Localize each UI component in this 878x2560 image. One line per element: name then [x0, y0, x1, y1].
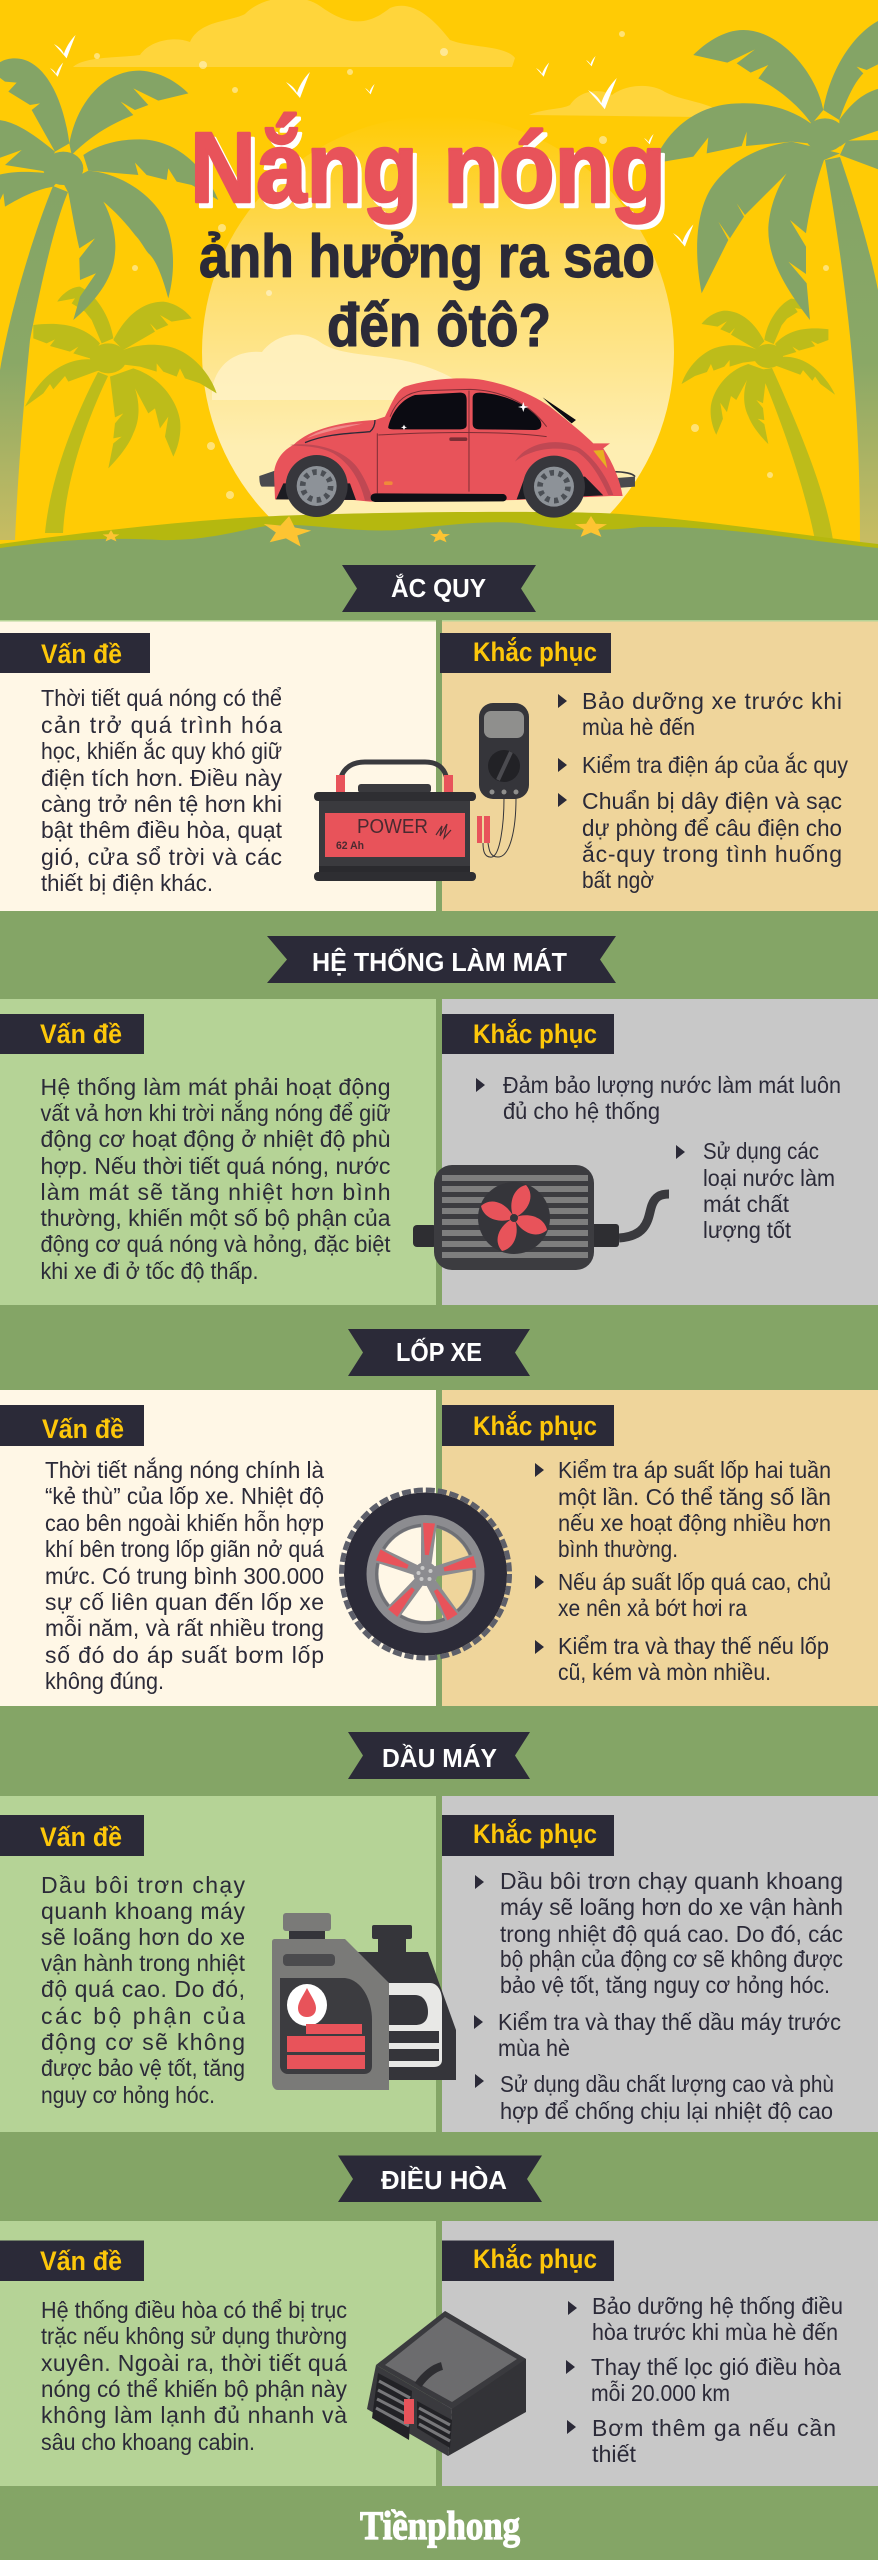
text: làm mát problem: khi xe đi ở tốc độ thấp. [40, 1258, 258, 1284]
list: điều hòa fixes: Thay thế lọc gió điều hòa [591, 2354, 841, 2380]
cloud: in sun [212, 335, 470, 400]
background strip: green page sections [0, 620, 878, 2560]
panel: làm mát khắc phục [442, 999, 878, 1305]
footer logo: Tiền Phong: Tiềnphong [360, 2503, 520, 2548]
text: dầu máy problem: Dầu bôi trơn chạy [41, 1872, 246, 1898]
list: lốp xe fixes: xe nên xả bớt hơi ra [558, 1595, 747, 1621]
text: làm mát problem: vất vả hơn khi trời nắng nóng để giữ [40, 1100, 390, 1126]
panel: dầu máy vấn đề [0, 1796, 436, 2132]
list: làm mát fixes: mát chất [703, 1191, 790, 1217]
tab: vấn đề: Vấn đề [40, 1822, 122, 1852]
tab: vấn đề [0, 1815, 144, 1856]
panel: ắc quy vấn đề [0, 620, 436, 911]
tab: vấn đề [0, 1014, 144, 1054]
palm: large right [653, 20, 878, 545]
tab: khắc phục [442, 1815, 614, 1856]
title: đến ôtô? [327, 292, 551, 359]
tab: khắc phục: Khắc phục [473, 2243, 597, 2274]
text: lốp xe problem: không đúng. [45, 1668, 164, 1694]
list: làm mát fixes: Sử dụng các [703, 1138, 819, 1164]
tab: vấn đề: Vấn đề [40, 1019, 122, 1049]
list: ắc quy fixes: dự phòng để câu điện cho [582, 815, 842, 841]
text: ắc quy problem: thiết bị điện khác. [41, 870, 213, 896]
cloud: right [529, 86, 717, 117]
starfish [103, 513, 607, 548]
list: lốp xe fixes: bình thường. [558, 1536, 678, 1562]
ground [0, 512, 878, 620]
list: ắc quy fixes: ắc-quy trong tình huống [582, 841, 842, 867]
list: làm mát fixes: đủ cho hệ thống [503, 1098, 660, 1124]
title: ảnh hưởng ra sao [199, 223, 655, 290]
banner: hệ thống làm mát: HỆ THỐNG LÀM MÁT [312, 947, 567, 977]
list: dầu máy fixes: Kiểm tra và thay thế dầu máy trước [498, 2009, 841, 2035]
icon: battery: POWER [357, 816, 428, 838]
list: điều hòa fixes: thiết [592, 2441, 637, 2467]
banner: điều hòa: ĐIỀU HÒA [381, 2165, 507, 2195]
list: dầu máy fixes: máy sẽ loãng hơn do xe vận hành [500, 1894, 843, 1920]
icon: multimeter [477, 703, 529, 857]
text: điều hòa problem: Hệ thống điều hòa có thể bị trục [41, 2297, 347, 2323]
list: lốp xe fixes: cũ, kém và mòn nhiều. [558, 1659, 771, 1685]
text: làm mát problem: động cơ hoạt động ở nhiệt độ phù [40, 1126, 390, 1152]
palm: small left [25, 287, 217, 533]
text: lốp xe problem: cao bên ngoài khiến hỗn hợp [45, 1510, 324, 1536]
text: làm mát problem [40, 1074, 391, 1284]
text: dầu máy problem: động cơ sẽ không [41, 2029, 245, 2055]
list: lốp xe fixes: nếu xe hoạt động nhiều hơn [558, 1510, 831, 1536]
list: dầu máy fixes: hợp để chống chịu lại nhiệt độ cao [500, 2098, 833, 2124]
list: làm mát fixes: Đảm bảo lượng nước làm mát luôn [503, 1072, 841, 1098]
list: ắc quy fixes: mùa hè đến [582, 714, 695, 740]
tab: vấn đề [0, 633, 150, 673]
list: dầu máy fixes: trong nhiệt độ quá cao. Do đó, các [500, 1921, 843, 1947]
text: điều hòa problem: không làm lạnh đủ nhanh và [41, 2402, 347, 2428]
title: Nắng nóng [194, 117, 670, 229]
front bottle [272, 1913, 389, 2090]
panel: ắc quy khắc phục [440, 620, 878, 911]
banner: lốp xe [348, 1329, 530, 1376]
banner: ắc quy [342, 565, 536, 612]
panel: điều hòa vấn đề [0, 2221, 436, 2486]
list: điều hòa fixes: Bảo dưỡng hệ thống điều [592, 2293, 843, 2319]
list: dầu máy fixes: Sử dụng dầu chất lượng cao và phù [500, 2071, 834, 2097]
panel: làm mát vấn đề [0, 999, 436, 1305]
text: làm mát problem: hợp. Nếu thời tiết quá nóng, nước [40, 1153, 390, 1179]
sparkle dots [94, 31, 829, 499]
list: ắc quy fixes: Bảo dưỡng xe trước khi [582, 688, 842, 714]
list: điều hòa fixes [566, 2293, 843, 2467]
text: ắc quy problem: gió, cửa sổ trời và các [41, 844, 282, 870]
text: ắc quy problem: bật thêm điều hòa, quạt [41, 817, 283, 843]
banner: hệ thống làm mát [267, 936, 616, 983]
tab: khắc phục [442, 1405, 614, 1446]
list: dầu máy fixes: Dầu bôi trơn chạy quanh khoang [500, 1868, 843, 1894]
panel: lốp xe khắc phục [442, 1390, 878, 1706]
tab: khắc phục: Khắc phục [473, 636, 597, 667]
tab: khắc phục [442, 2240, 614, 2281]
birds [50, 35, 693, 247]
hero background [0, 0, 878, 620]
icon: tire [342, 1490, 510, 1658]
list: lốp xe fixes: Kiểm tra áp suất lốp hai tuần [558, 1457, 831, 1483]
text: lốp xe problem: số đó do áp suất bơm lốp [45, 1642, 324, 1668]
list: ắc quy fixes: Kiểm tra điện áp của ắc quy [582, 752, 848, 778]
text: ắc quy problem: càng trở nên tệ hơn khi [41, 791, 282, 817]
tab: vấn đề: Vấn đề [40, 2246, 122, 2276]
text: điều hòa problem: nóng có thể khiến bộ phận này [41, 2376, 347, 2402]
banner: dầu máy: DẦU MÁY [382, 1743, 497, 1773]
list: ắc quy fixes [558, 688, 848, 893]
text: lốp xe problem: Thời tiết nắng nóng chính là [45, 1457, 324, 1483]
tab: khắc phục: Khắc phục [473, 1018, 597, 1049]
text: dầu máy problem: sẽ loãng hơn do xe [41, 1924, 245, 1950]
list: lốp xe fixes: một lần. Có thể tăng số lần [558, 1484, 831, 1510]
text: lốp xe problem: mức. Có trung bình 300.000 [45, 1563, 324, 1589]
rear bottle [358, 1925, 456, 2080]
text: làm mát problem: thường, khiến một số bộ phận của [40, 1205, 391, 1231]
text: dầu máy problem: vận hành trong nhiệt [41, 1950, 246, 1976]
text: ắc quy problem [41, 685, 283, 896]
banner: điều hòa [338, 2156, 542, 2202]
text: ắc quy problem: học, khiến ắc quy khó giữ [41, 738, 282, 764]
title: Nắng nóng [190, 112, 666, 224]
text: điều hòa problem: sâu cho khoang cabin. [41, 2429, 255, 2455]
text: làm mát problem: làm mát sẽ tăng nhiệt hơn bình [40, 1179, 390, 1205]
list: làm mát fixes [476, 1072, 841, 1243]
text: làm mát problem: Hệ thống làm mát phải hoạt động [40, 1074, 390, 1100]
text: dầu máy problem [41, 1872, 246, 2108]
title [190, 112, 670, 359]
tab: vấn đề: Vấn đề [41, 639, 122, 669]
list: làm mát fixes: lượng tốt [703, 1217, 792, 1243]
icon: oil bottles [272, 1913, 456, 2090]
icon: battery [314, 762, 476, 881]
tab: khắc phục [442, 1014, 614, 1054]
banner: lốp xe: LỐP XE [396, 1337, 482, 1367]
list: điều hòa fixes: hòa trước khi mùa hè đến [592, 2319, 838, 2345]
palm: large left [0, 58, 218, 540]
list: lốp xe fixes [535, 1457, 831, 1685]
panel: dầu máy khắc phục [442, 1796, 878, 2132]
list: dầu máy fixes [474, 1868, 843, 2124]
banner: dầu máy [348, 1732, 530, 1779]
text: dầu máy problem: nguy cơ hỏng hóc. [41, 2082, 215, 2108]
panel: lốp xe vấn đề [0, 1390, 436, 1706]
tab: vấn đề [0, 1405, 144, 1446]
list: dầu máy fixes: mùa hè [498, 2035, 570, 2061]
text: dầu máy problem: quanh khoang máy [41, 1898, 246, 1924]
text: dầu máy problem: các bộ phận của [41, 2003, 245, 2029]
panel: điều hòa khắc phục [442, 2221, 878, 2486]
list: làm mát fixes: loại nước làm [703, 1165, 835, 1191]
list: lốp xe fixes: Nếu áp suất lốp quá cao, chủ [558, 1569, 831, 1595]
cloud: top [73, 0, 515, 67]
tab: khắc phục [440, 633, 611, 673]
text: dầu máy problem: được bảo vệ tốt, tăng [41, 2055, 245, 2081]
list: lốp xe fixes: Kiểm tra và thay thế nếu lốp [558, 1633, 829, 1659]
text: lốp xe problem: khí bên trong lốp giãn nở quá [45, 1536, 324, 1562]
text: điều hòa problem [41, 2297, 347, 2455]
list: dầu máy fixes: bảo vệ tốt, tăng nguy cơ hỏng hóc. [500, 1972, 830, 1998]
text: lốp xe problem: mỗi năm, và rất nhiều trong [45, 1615, 324, 1641]
text: lốp xe problem: “kẻ thù” của lốp xe. Nhiệt độ [45, 1483, 324, 1509]
tab: vấn đề [0, 2240, 144, 2281]
text: điều hòa problem: xuyên. Ngoài ra, thời tiết quá [41, 2350, 347, 2376]
text: làm mát problem: động cơ quá nóng và hỏng, đặc biệt [40, 1231, 391, 1257]
list: dầu máy fixes: bộ phận của động cơ sẽ không được [500, 1946, 843, 1972]
icon: air conditioner unit [367, 2311, 526, 2456]
banner: ắc quy: ẮC QUY [391, 573, 486, 603]
list: điều hòa fixes: mỗi 20.000 km [591, 2380, 730, 2406]
list: ắc quy fixes: bất ngờ [582, 867, 654, 893]
text: ắc quy problem: cản trở quá trình hóa [41, 712, 282, 738]
text: ắc quy problem: Thời tiết quá nóng có thể [41, 685, 282, 711]
text: điều hòa problem: trặc nếu không sử dụng thường [41, 2323, 347, 2349]
text: lốp xe problem [45, 1457, 324, 1694]
palm: small right [682, 299, 835, 540]
tab: khắc phục: Khắc phục [473, 1410, 597, 1441]
car illustration [259, 378, 635, 518]
sun [202, 116, 674, 588]
text: dầu máy problem: độ quá cao. Do đó, [41, 1976, 245, 2002]
icon: radiator fan [413, 1165, 669, 1270]
tab: vấn đề: Vấn đề [42, 1414, 124, 1444]
text: lốp xe problem: sự cố liên quan đến lốp xe [45, 1589, 324, 1615]
list: điều hòa fixes: Bơm thêm ga nếu cần [592, 2415, 836, 2441]
text: ắc quy problem: điện tích hơn. Điều này [41, 765, 282, 791]
tab: khắc phục: Khắc phục [473, 1818, 597, 1849]
list: ắc quy fixes: Chuẩn bị dây điện và sạc [582, 788, 842, 814]
icon: battery: 62 Ah [336, 840, 364, 852]
